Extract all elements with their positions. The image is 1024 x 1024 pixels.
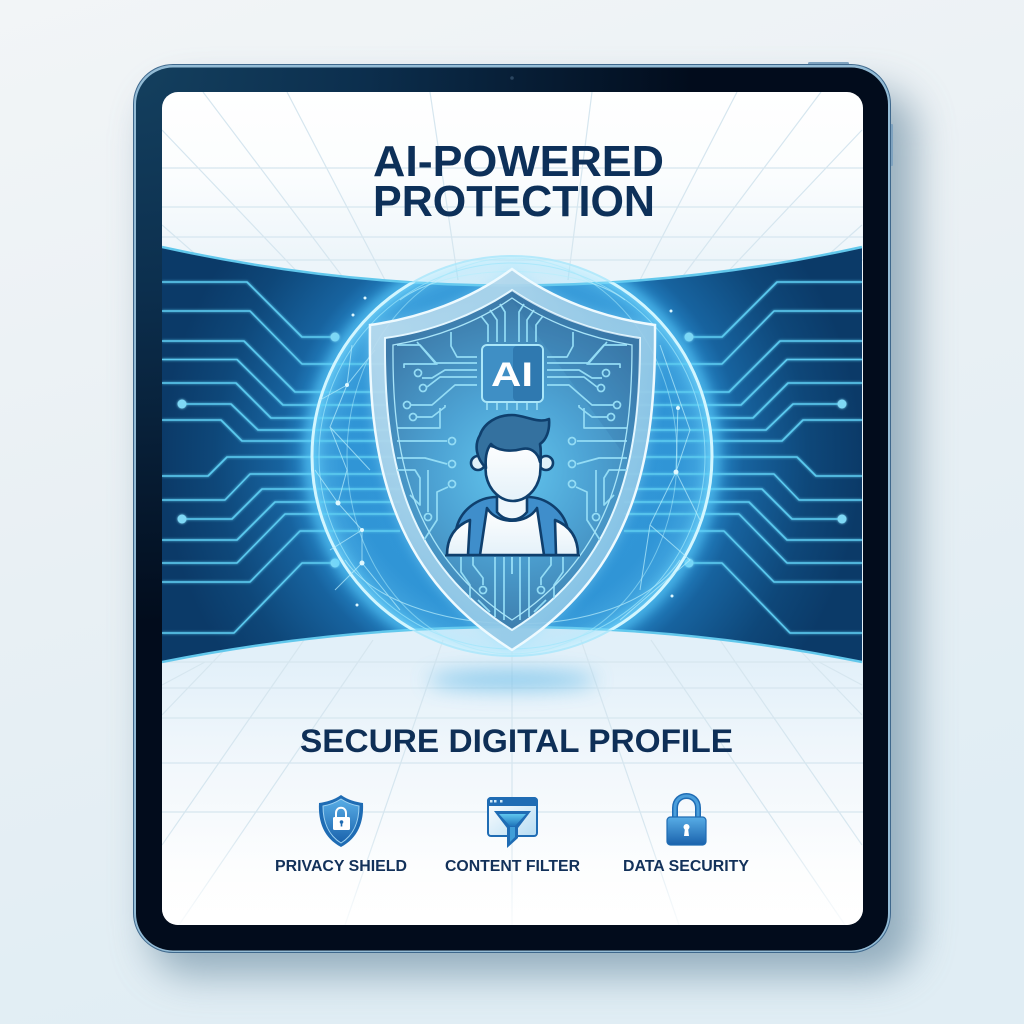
tablet device	[133, 62, 893, 953]
avatar bottom edge	[445, 554, 580, 556]
floor glow under shield	[427, 671, 597, 689]
neck	[497, 490, 527, 520]
ears	[471, 456, 485, 470]
shield glow	[370, 269, 655, 650]
shield right facet	[512, 290, 640, 460]
circuit traces right	[624, 282, 862, 633]
tablet drop shadow	[150, 90, 915, 975]
shield body	[385, 290, 640, 630]
feature: privacy shield	[275, 795, 407, 875]
chip label: AI	[491, 356, 533, 394]
feature: data security	[623, 796, 750, 875]
globe network lines	[315, 272, 700, 624]
icon: browser window with funnel	[487, 797, 538, 848]
screen	[162, 92, 863, 925]
title: PROTECTION	[373, 177, 655, 226]
right arm	[555, 520, 578, 555]
shield rim	[370, 269, 655, 650]
left arm	[447, 520, 470, 555]
shirt	[480, 508, 544, 555]
label: PRIVACY SHIELD	[275, 858, 407, 875]
face	[485, 441, 541, 501]
globe fill	[311, 255, 713, 657]
shield circuit traces right	[512, 304, 627, 620]
icon: padlock	[667, 796, 706, 845]
hair	[477, 415, 549, 468]
dark circuit band	[162, 247, 862, 662]
backpack	[456, 497, 568, 555]
label: CONTENT FILTER	[445, 858, 580, 875]
person avatar	[447, 415, 578, 555]
globe sphere	[311, 255, 713, 657]
title	[373, 137, 664, 226]
subtitle: SECURE DIGITAL PROFILE	[300, 723, 733, 759]
tablet frame	[133, 64, 891, 953]
label: DATA SECURITY	[623, 858, 750, 875]
chip pins	[487, 403, 537, 410]
grid fade	[162, 846, 863, 925]
feature: content filter	[445, 797, 580, 875]
shield interior outline	[393, 298, 632, 620]
shield circuit traces left	[397, 304, 512, 620]
screen background	[162, 92, 863, 925]
main shield	[370, 269, 655, 650]
side and top buttons	[808, 62, 893, 166]
camera	[510, 76, 514, 80]
perspective grid	[162, 92, 863, 925]
title: AI-POWERED	[373, 137, 664, 186]
circuit traces left	[162, 282, 400, 633]
band rim	[162, 247, 862, 286]
AI chip	[482, 345, 543, 410]
icon: shield with padlock	[319, 795, 363, 847]
